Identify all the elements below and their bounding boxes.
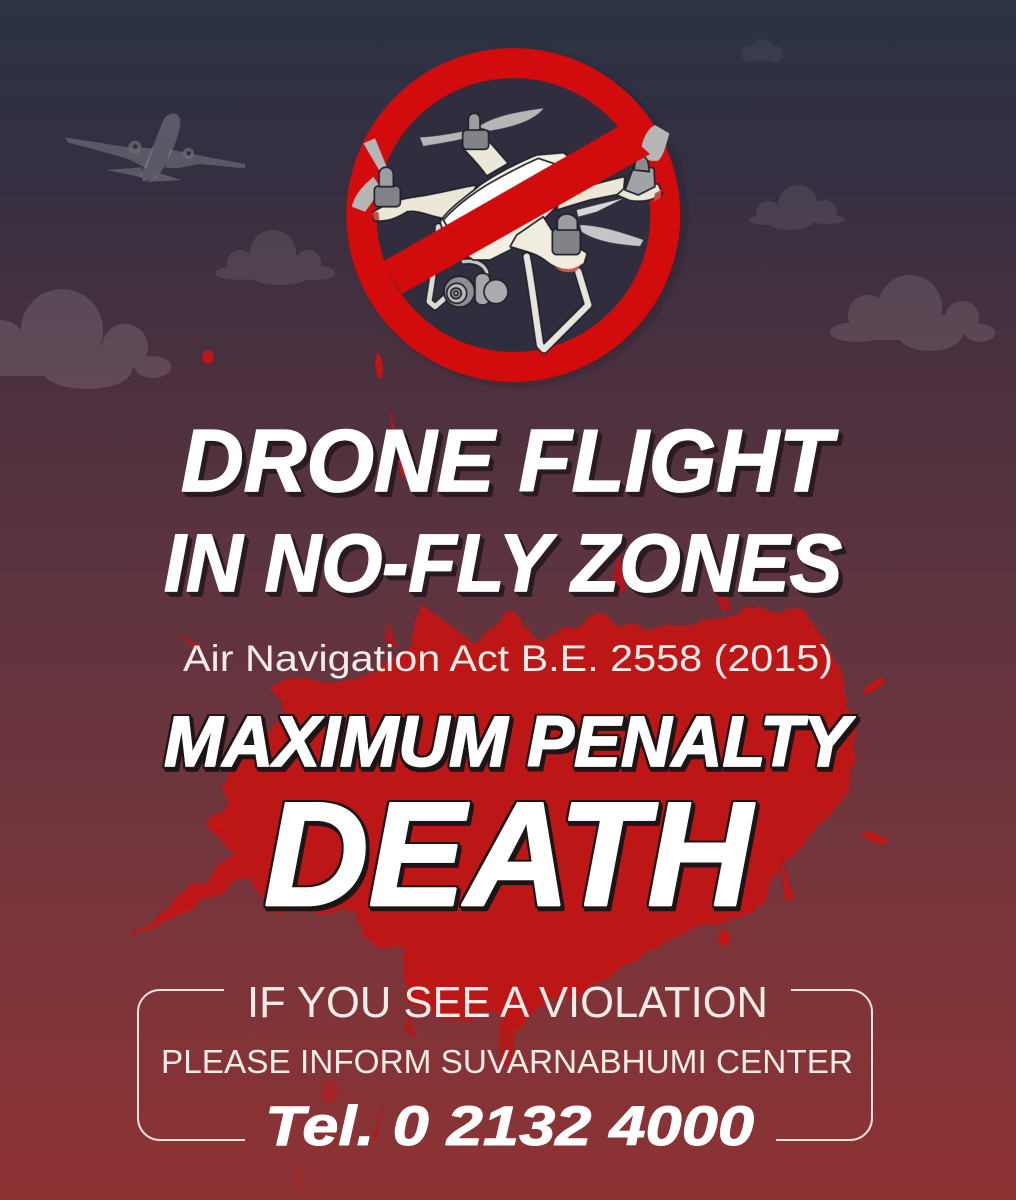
icon: prohibited drone [352,52,685,385]
cloud: left [0,289,171,389]
box outline [138,990,872,1140]
icon: airplane [65,114,245,182]
cloud: upper right [749,185,845,230]
cloud: top small [742,39,783,62]
top shell [443,158,563,237]
telephone: Tel. 0 2132 4000 [265,1094,754,1157]
contact box [138,978,872,1157]
act reference: Air Navigation Act B.E. 2558 (2015) [183,638,833,679]
violation line: IF YOU SEE A VIOLATION [247,978,768,1027]
front arm [510,217,587,270]
title line 1: DRONE FLIGHT [181,411,838,510]
blood droplets [174,350,890,1192]
red lights [554,263,583,272]
rear arm [462,142,508,176]
right arm [557,177,625,210]
drone [352,108,669,349]
left landing gear [429,227,448,307]
main body [440,153,577,260]
left arm [373,185,477,221]
inform line: PLEASE INFORM SUVARNABHUMI CENTER [161,1043,853,1080]
title line 2: IN NO-FLY ZONES [164,518,842,609]
propellers [352,108,669,246]
prohibition disc [361,63,665,367]
penalty heading: MAXIMUM PENALTY [164,703,856,782]
death heading: DEATH [264,772,755,937]
cloud: right [830,275,995,351]
sign shadow [352,52,685,385]
cloud: middle [215,230,335,285]
motors [374,113,655,255]
front landing gear [527,257,588,349]
prohibition bar [383,126,650,294]
clouds [0,39,995,389]
camera gimbal [463,261,487,293]
blood splatter [128,605,855,1035]
